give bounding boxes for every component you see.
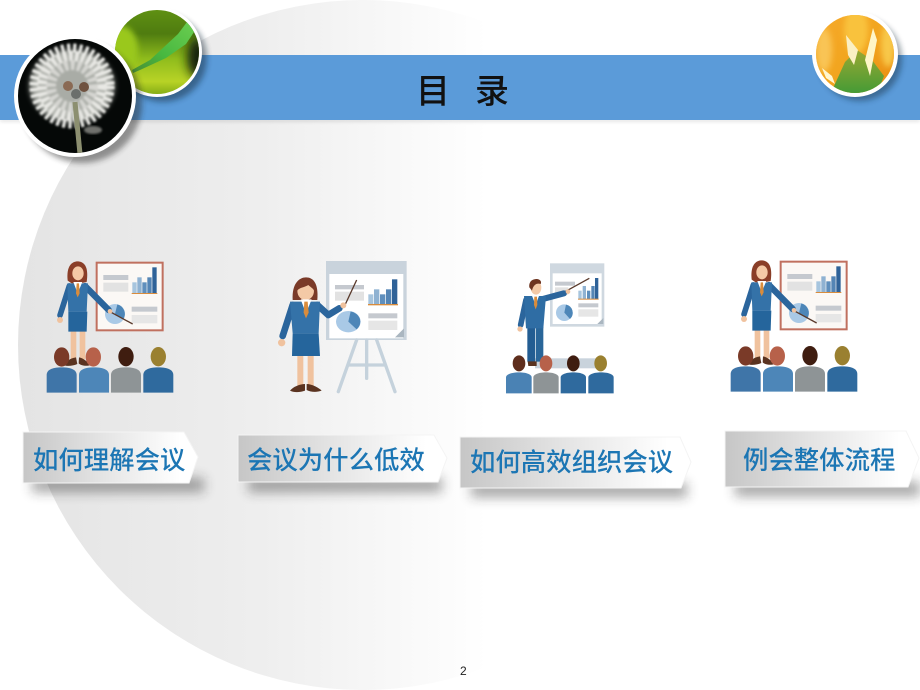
label: 会议为什么低效: 会议为什么低效 [247,447,425,475]
icon: woman presenting to audience [47,261,173,393]
header band [0,55,920,122]
label: 例会整体流程: 例会整体流程 [743,447,895,475]
photo: tulip [812,6,902,101]
icon: woman at flip chart [278,261,407,392]
photo: dandelion [14,35,142,163]
label: 例会整体流程 [725,431,920,496]
label: 如何理解会议: 如何理解会议 [33,447,185,475]
icon: woman presenting to audience, repeated [731,260,857,392]
label: 如何高效组织会议 [460,437,691,497]
title: 录 [475,73,509,111]
label: 如何理解会议 [23,432,204,492]
page number: 2 [460,664,467,678]
background circle [18,0,708,690]
photo: green leaf [106,7,209,102]
label: 如何高效组织会议: 如何高效组织会议 [470,449,673,477]
label: 会议为什么低效 [238,435,447,492]
icon: man presenting to audience [506,263,614,393]
title: 目 [416,73,450,111]
